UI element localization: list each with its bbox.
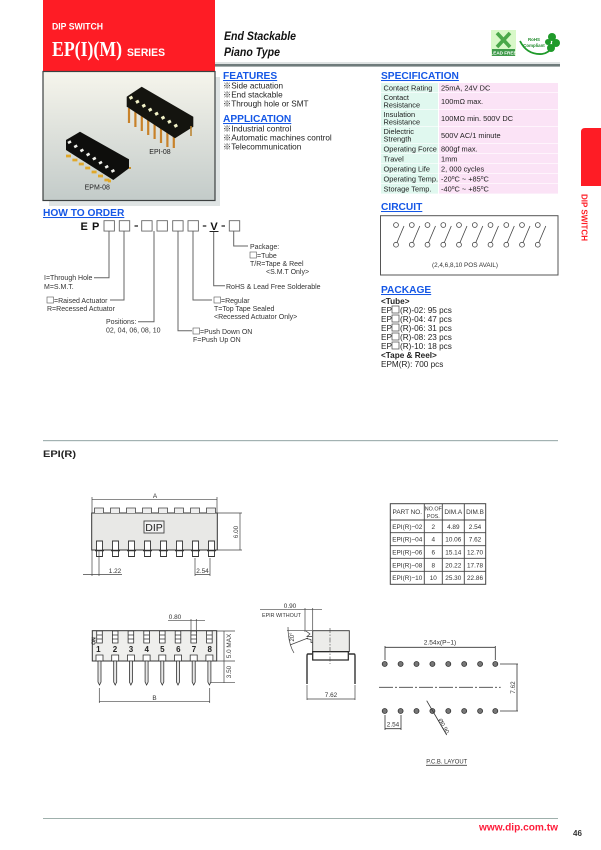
specification table: 2, 000 cycles — [441, 164, 484, 174]
option: actuator — [47, 297, 116, 313]
option: positions — [106, 319, 161, 334]
option: package — [250, 244, 309, 276]
product type title: Piano Type — [224, 45, 280, 59]
option: actuator: =Raised Actuator — [54, 298, 108, 305]
dimension table: PART NO. — [393, 509, 422, 516]
dimension table: EPI(R)−08 — [392, 562, 423, 569]
specification table: 100MΩ min. 500V DC — [441, 114, 514, 123]
option: package: T/R=Tape & Reel — [250, 261, 304, 268]
option: sealing: T=Top Tape Sealed — [214, 306, 274, 313]
package: EP — [381, 324, 392, 333]
dimension table — [390, 504, 486, 584]
specification table: o — [452, 185, 455, 191]
specification table: Storage Temp. — [384, 184, 431, 194]
drawing: top view: 2.54 — [196, 568, 209, 575]
specification table: Insulation — [384, 110, 415, 119]
dimension table: NO.OF — [425, 506, 443, 512]
package: (R)-02: 95 pcs — [400, 306, 452, 315]
part number code: E — [80, 221, 88, 233]
specification table: o — [452, 175, 455, 181]
product type title: End Stackable — [224, 29, 296, 43]
option: positions: 02, 04, 06, 08, 10 — [106, 328, 161, 334]
drawing: top view: 6.00 — [233, 525, 240, 538]
icon: lead free: LEAD FREE — [490, 50, 517, 56]
circuit heading: CIRCUIT — [381, 202, 423, 213]
package: EPM(R): 700 pcs — [381, 360, 443, 369]
part number code — [80, 221, 240, 233]
drawing: top view: 1.22 — [109, 568, 122, 575]
option: package: Package: — [250, 244, 279, 251]
footer — [43, 818, 582, 838]
drawing: front view: 2 — [113, 645, 118, 654]
option: push direction: F=Push Up ON — [193, 337, 241, 344]
drawing: top view: DIP — [145, 522, 163, 534]
option: sealing — [214, 297, 297, 321]
dimension table: 4.89 — [447, 524, 460, 531]
option: package: =Tube — [257, 253, 277, 260]
leader lines — [94, 231, 248, 331]
header rule — [215, 62, 560, 67]
photo: EPI-08 switch — [127, 87, 193, 156]
drawing: front view: 1 — [96, 645, 101, 654]
drawing: front view: 8 — [207, 645, 212, 654]
option: push direction: =Push Down ON — [200, 329, 252, 336]
package: EP — [381, 342, 392, 351]
specification table: Operating Life — [384, 164, 430, 174]
specification table: 100mΩ max. — [441, 97, 483, 106]
drawing: front view: B — [152, 695, 157, 702]
drawing: front view: 7 — [192, 645, 197, 654]
option: push direction — [193, 328, 252, 344]
section divider — [43, 440, 558, 441]
header — [43, 0, 560, 72]
product photo panel — [43, 72, 220, 206]
drawing: front view — [92, 614, 235, 703]
dimension table: EPI(R)−04 — [392, 536, 423, 544]
dimension table: 22.86 — [467, 575, 483, 582]
specification table: Operating Force — [384, 144, 437, 154]
option: sealing: <Recessed Actuator Only> — [214, 314, 297, 321]
specification table: o — [481, 185, 484, 191]
drawing: front view: 3 — [129, 645, 134, 654]
drawing: front view: 4 — [144, 645, 149, 654]
package: PACKAGE — [381, 285, 431, 296]
dimension table: EPI(R)−02 — [392, 524, 423, 531]
photo: EPM-08 switch: EPM-08 — [85, 185, 110, 192]
features: ※Side actuation — [223, 82, 284, 90]
drawing: side view: 0.90 — [284, 603, 297, 610]
specification table: Strength — [384, 134, 411, 144]
side tab: DIP SWITCH: DIP SWITCH — [580, 194, 588, 241]
circuit diagram: (2,4,6,8,10 POS AVAIL) — [432, 262, 498, 269]
package: (R)-10: 18 pcs — [400, 342, 452, 351]
package: (R)-04: 47 pcs — [400, 315, 452, 324]
application: APPLICATION — [223, 114, 291, 125]
drawing: PCB layout: 2.54 — [387, 722, 400, 728]
dimension table: POS. — [427, 514, 440, 520]
drawing: front view: 0.80 — [169, 614, 182, 621]
dimension table: 2.54 — [469, 524, 482, 531]
icon: lead free — [490, 30, 517, 56]
application: ※Industrial control — [223, 124, 291, 134]
dimension table: 20.22 — [445, 562, 462, 569]
dimension table: 10 — [430, 575, 437, 582]
option: actuator: R=Recessed Actuator — [47, 306, 116, 313]
option: sealing: =Regular — [221, 298, 250, 305]
package: EP — [381, 333, 392, 342]
package: EP — [381, 306, 392, 315]
drawing: top view — [83, 493, 242, 576]
drawing: side view: 7.62 — [325, 692, 338, 699]
specification table: Dielectric — [384, 127, 414, 136]
part number code: P — [92, 221, 99, 233]
specification table: Operating Temp. — [384, 174, 438, 184]
specification table: -20 — [441, 174, 452, 184]
specification table: C — [484, 184, 490, 194]
dimension table: EPI(R)−06 — [392, 550, 423, 556]
section title: EPI(R): EPI(R) — [43, 449, 76, 460]
specification table: -40 — [441, 184, 452, 194]
drawing: PCB layout: 2.54x(P−1) — [424, 640, 456, 647]
footer: 46 — [573, 829, 582, 838]
product type title — [224, 29, 296, 59]
dimension table: DIM.B — [466, 509, 484, 516]
option: positions: Positions: — [106, 319, 136, 326]
dimension table: 15.14 — [445, 550, 462, 556]
specification table: Resistance — [384, 100, 420, 110]
icon: RoHS compliant: Compliant — [523, 43, 545, 48]
drawing: front view: ON — [92, 637, 98, 645]
specification table: Contact — [384, 93, 409, 102]
icon: RoHS compliant: RoHS — [528, 37, 540, 42]
drawing: PCB layout — [379, 640, 518, 766]
dimension table: 12.70 — [467, 550, 483, 556]
drawing: PCB layout: Ø0.90 — [436, 718, 450, 736]
option: through hole: M=S.M.T. — [44, 284, 74, 291]
dimension table: 7.62 — [469, 536, 482, 544]
drawing: PCB layout: 7.62 — [510, 681, 517, 694]
application: ※Automatic machines control — [223, 134, 332, 142]
specification table: C ~ +85 — [454, 184, 481, 194]
dimension table: 2 — [432, 524, 436, 531]
part number code: V — [210, 221, 218, 233]
dimension table: 10.06 — [445, 536, 462, 544]
footer: www.dip.com.tw — [478, 822, 559, 834]
how to order heading: HOW TO ORDER — [43, 208, 125, 219]
photo: EPM-08 switch — [66, 132, 131, 192]
dimension table: 8 — [432, 562, 436, 569]
drawing: top view: A — [153, 493, 158, 500]
dimension table: 25.30 — [445, 575, 462, 582]
option: package: <S.M.T Only> — [266, 269, 309, 276]
specification heading: SPECIFICATION — [381, 71, 459, 82]
specification table: 1mm — [441, 154, 457, 164]
application: ※Telecommunication — [223, 142, 302, 152]
features — [223, 71, 309, 108]
how to order diagram — [44, 221, 321, 344]
drawing: side view: EPIR WITHOUT — [262, 613, 302, 619]
option: through hole: I=Through Hole — [44, 275, 93, 282]
option: through hole — [44, 275, 93, 291]
drawing: front view: 3.50 — [226, 665, 233, 678]
photo: EPI-08 switch: EPI-08 — [149, 149, 171, 156]
package: (R)-06: 31 pcs — [400, 324, 452, 333]
specification table: 25mA, 24V DC — [441, 84, 491, 92]
package: EP — [381, 315, 392, 324]
features: ※Through hole or SMT — [223, 100, 309, 108]
specification table: C ~ +85 — [454, 174, 481, 184]
header red banner: SERIES — [127, 47, 165, 59]
drawing: front view: 5 — [160, 645, 165, 654]
dimension table: 6 — [432, 550, 436, 556]
dimension table: 4 — [432, 536, 436, 544]
drawing: front view: 6 — [176, 645, 181, 654]
specification table: o — [481, 175, 484, 181]
circuit diagram — [380, 216, 558, 275]
specification table: Travel — [384, 154, 404, 164]
specification table: 800gf max. — [441, 144, 478, 154]
specification table — [381, 83, 558, 194]
dimension table: EPI(R)−10 — [392, 575, 423, 582]
header red banner — [43, 0, 215, 72]
features: ※End stackable — [223, 90, 283, 100]
drawing: PCB layout: P.C.B. LAYOUT — [426, 758, 467, 766]
application — [223, 114, 332, 152]
option: RoHS: RoHS & Lead Free Solderable — [226, 284, 321, 291]
specification table: C — [484, 174, 490, 184]
specification table: Contact Rating — [384, 84, 432, 92]
package: <Tube> — [381, 297, 410, 306]
features: FEATURES — [223, 71, 277, 82]
specification table: Resistance — [384, 118, 420, 126]
dimension table: DIM.A — [444, 509, 463, 516]
drawing: front view: 5.0 MAX — [226, 633, 233, 658]
package: <Tape & Reel> — [381, 351, 437, 360]
dimension table: 17.78 — [467, 562, 483, 569]
header red banner: DIP SWITCH — [52, 22, 103, 32]
specification table: 500V AC/1 minute — [441, 131, 501, 140]
icon: RoHS compliant — [520, 33, 560, 54]
drawing: side view — [260, 603, 355, 700]
header red banner: EP(I)(M) — [52, 37, 122, 61]
package — [381, 285, 452, 369]
side tab: DIP SWITCH — [580, 128, 601, 241]
drawing: side view: 20° — [290, 632, 296, 642]
package: (R)-08: 23 pcs — [400, 333, 452, 342]
